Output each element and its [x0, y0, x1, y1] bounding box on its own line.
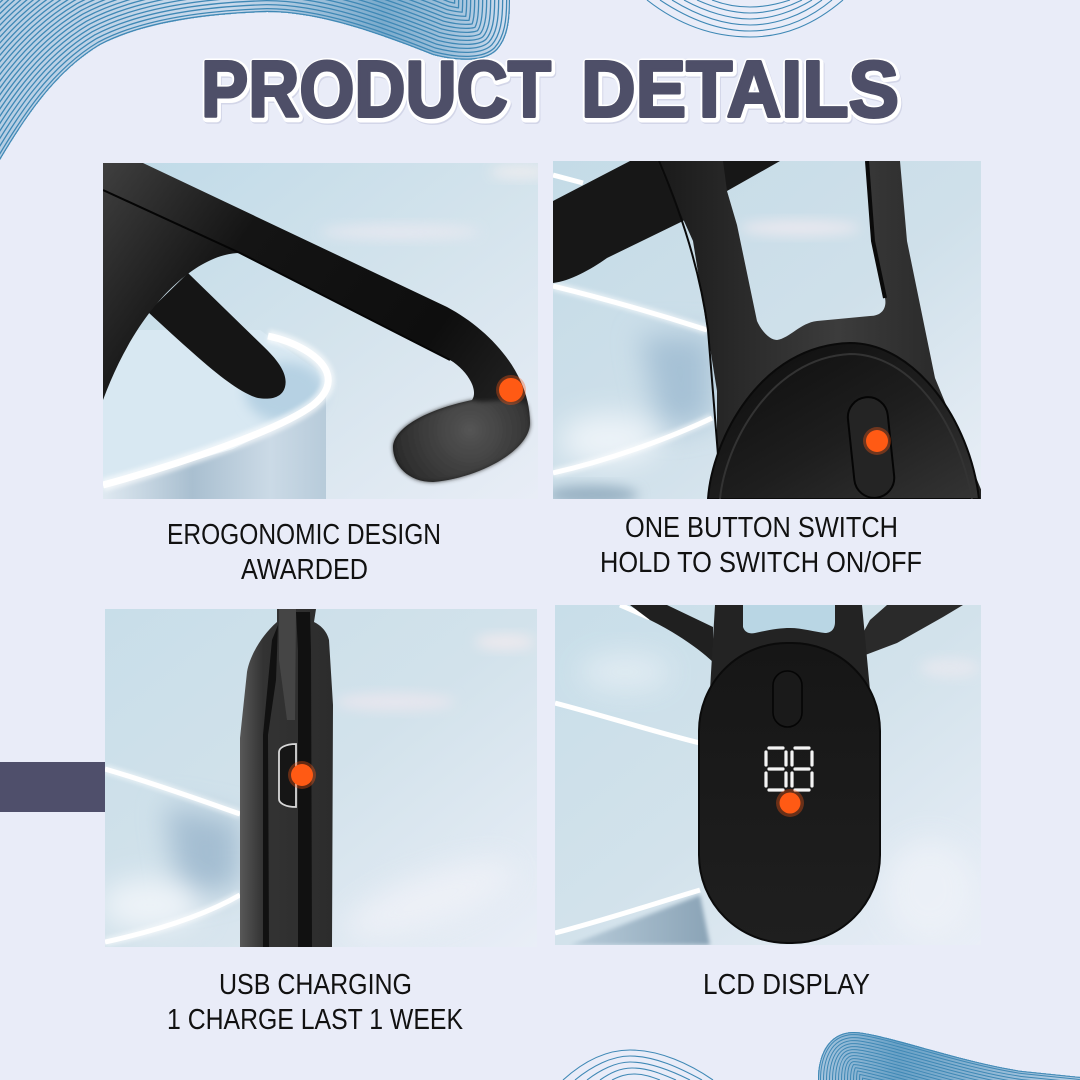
white curved band — [103, 336, 328, 485]
arm seam — [103, 190, 450, 360]
caption: one button switch: ONE BUTTON SWITCH — [625, 512, 898, 544]
white streak glow — [553, 286, 712, 473]
hook shading — [393, 400, 530, 482]
button outline — [773, 671, 802, 727]
caption: ergonomic design: EROGONOMIC DESIGN — [167, 519, 441, 551]
white light streaks — [105, 769, 240, 942]
white streak glow — [105, 769, 240, 942]
white light streaks — [555, 605, 700, 933]
switch button — [846, 395, 896, 500]
white band glow — [103, 336, 328, 485]
marker dot — [776, 789, 804, 817]
decorative wave: bottom right — [815, 1028, 1080, 1080]
caption: LCD display: LCD DISPLAY — [703, 969, 870, 1001]
left accent bar — [0, 762, 105, 812]
marker dot — [863, 427, 891, 455]
micro USB port — [279, 744, 296, 807]
panel: one button switch photo — [546, 161, 985, 505]
frame stem — [710, 605, 870, 690]
caption: USB charging — [167, 969, 464, 1036]
grey-blue block — [570, 895, 710, 945]
marker dot — [288, 761, 316, 789]
cylinder side — [103, 388, 326, 499]
panel: LCD display photo — [555, 605, 981, 945]
title: PRODUCT — [203, 48, 553, 136]
title: DETAILS — [583, 48, 901, 136]
title: DETAILS — [581, 44, 899, 134]
caption: one button switch — [600, 512, 922, 579]
title — [201, 44, 901, 136]
frame — [657, 161, 985, 499]
decorative wave: top centre — [647, 0, 843, 37]
caption: USB charging: 1 CHARGE LAST 1 WEEK — [167, 1004, 464, 1036]
decorative wave: top left — [0, 0, 512, 162]
decorative wave: bottom centre — [563, 1050, 713, 1080]
far tine — [148, 273, 286, 399]
caption: USB charging: USB CHARGING — [219, 969, 412, 1001]
panel: ergonomic design photo — [103, 163, 550, 499]
title: PRODUCT — [202, 46, 552, 135]
caption: ergonomic design — [167, 519, 441, 586]
left tine stub — [103, 230, 122, 283]
caption: one button switch: HOLD TO SWITCH ON/OFF — [600, 547, 922, 579]
left and right arms — [630, 605, 713, 662]
seven segment 88 readout — [766, 748, 812, 790]
pod — [708, 343, 979, 499]
hole colour behind frame — [743, 605, 835, 635]
panel: USB charging photo — [100, 609, 537, 954]
side stripes — [263, 612, 312, 947]
device side view — [240, 609, 333, 947]
marker dot — [496, 375, 526, 405]
title: DETAILS — [582, 46, 900, 135]
title: PRODUCT — [201, 44, 551, 134]
white light streaks — [553, 175, 712, 473]
arm of the device — [103, 163, 530, 482]
pod with screen — [699, 643, 880, 943]
caption: ergonomic design: AWARDED — [241, 554, 368, 586]
tube behind frame — [553, 161, 780, 283]
